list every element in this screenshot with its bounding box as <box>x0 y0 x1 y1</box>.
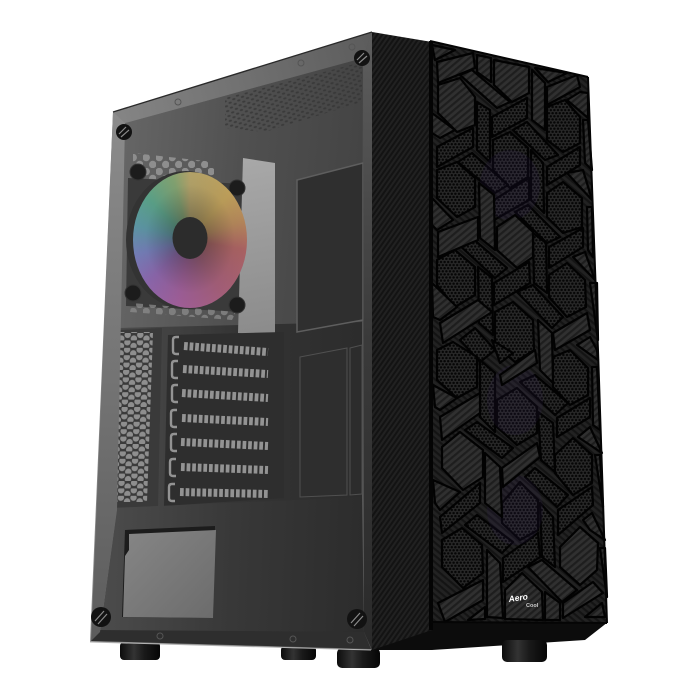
fan mounting frame <box>126 178 245 312</box>
logo: Aero Cool <box>507 591 539 609</box>
screw: bottom left <box>91 607 111 627</box>
foot: rear left <box>120 642 160 660</box>
logo: Aero Cool: Cool <box>526 603 539 609</box>
foot: rear middle <box>281 646 316 660</box>
glass right frame <box>363 32 372 650</box>
lower frame vent holes <box>130 303 236 320</box>
metal plate cutout <box>238 158 275 337</box>
drive bay lower left <box>300 348 347 497</box>
fan shadow <box>126 171 246 309</box>
drive bay upper <box>297 163 363 332</box>
glass top band <box>113 32 372 123</box>
side vent frame <box>112 328 162 508</box>
foot: front left <box>337 648 380 668</box>
shadowed underside base <box>92 622 608 650</box>
right edge trim <box>588 77 607 623</box>
screw: bottom right <box>347 609 367 629</box>
expansion slot rows <box>169 337 268 501</box>
side vent honeycomb <box>113 332 153 502</box>
drive bay lower right <box>350 345 362 495</box>
PSU shroud <box>100 497 364 632</box>
carbon hexagon strips <box>432 45 607 622</box>
fan rainbow ring <box>133 172 247 308</box>
front base <box>430 41 607 623</box>
PSU window <box>122 526 216 618</box>
rivets along top and bottom <box>157 44 355 643</box>
ceiling vent mesh <box>225 62 362 132</box>
left edge trim <box>429 41 433 630</box>
coloured fan glow <box>480 150 543 545</box>
screw: top left <box>116 124 132 140</box>
glass left frame <box>91 112 125 641</box>
glass bottom light edge <box>90 642 371 650</box>
RGB fan <box>126 171 247 309</box>
upper vent holes <box>133 153 214 182</box>
screw: top right <box>354 50 370 66</box>
fan hub <box>172 217 208 259</box>
interior back wall <box>118 58 363 335</box>
panel: tempered glass side <box>90 32 372 650</box>
bottom edge trim <box>431 622 607 623</box>
expansion slots panel <box>164 332 284 506</box>
lower tray <box>117 322 362 510</box>
panel: carbon side stripe <box>372 32 432 650</box>
bottom frame band <box>91 630 371 649</box>
fan screws <box>125 164 245 313</box>
glass top dark edge <box>113 32 372 112</box>
foot: front right <box>502 640 547 662</box>
mesh hexagon panels <box>437 98 593 588</box>
logo: Aero Cool: Aero <box>507 591 528 604</box>
panel: front face <box>430 41 607 630</box>
top edge trim <box>430 41 588 77</box>
